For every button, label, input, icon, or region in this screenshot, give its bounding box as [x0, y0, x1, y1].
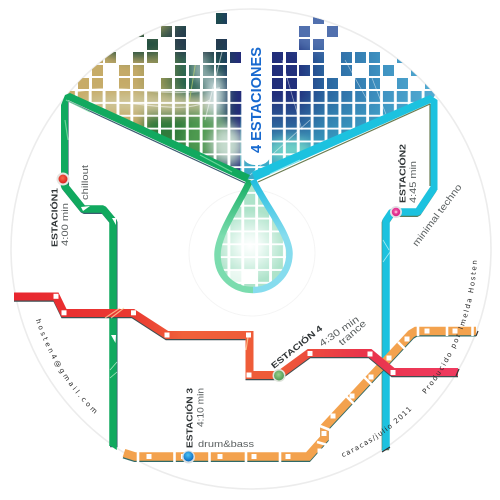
station 4 label: trance	[337, 318, 369, 348]
station 3 marker	[182, 450, 195, 464]
date credit: caracas/julio 2011	[342, 407, 412, 457]
faint inner ring	[189, 190, 315, 316]
red line	[14, 294, 459, 378]
station 2 label: minimal techno	[411, 182, 465, 249]
station 3 label: ESTACIÓN 3	[184, 388, 194, 448]
green line	[61, 93, 250, 450]
station 1 marker	[56, 172, 70, 186]
station 4 label: 4:30 min	[317, 314, 361, 349]
station 3 label: 4:10 min	[196, 388, 206, 427]
station 3 label: drum&bass	[198, 439, 254, 450]
station 2 label	[396, 144, 465, 249]
mosaic image tiles	[68, 13, 435, 180]
station 2 marker	[390, 206, 402, 218]
email credit: hosten4@gmail.com	[36, 318, 96, 414]
station 2 label: ESTACIÓN2	[396, 144, 408, 203]
station 3 label	[184, 388, 254, 450]
producer credit: Producido por Imelda Hosten	[422, 260, 477, 394]
station 1 label	[48, 165, 91, 247]
station 4 label: ESTACIÓN 4	[268, 322, 324, 371]
title capsule	[242, 18, 272, 165]
station 4 marker	[272, 369, 286, 382]
station 1 label: chillout	[80, 165, 91, 200]
cyan line	[252, 95, 438, 452]
station 4 label	[268, 314, 369, 371]
station 1 label: 4:00 min	[60, 203, 71, 246]
title: 4 ESTACIONES	[248, 47, 265, 153]
water drop	[217, 180, 297, 295]
orange line	[124, 325, 478, 462]
station 1 label: ESTACIÓN1	[48, 188, 60, 247]
station 2 label: 4:45 min	[408, 161, 419, 203]
